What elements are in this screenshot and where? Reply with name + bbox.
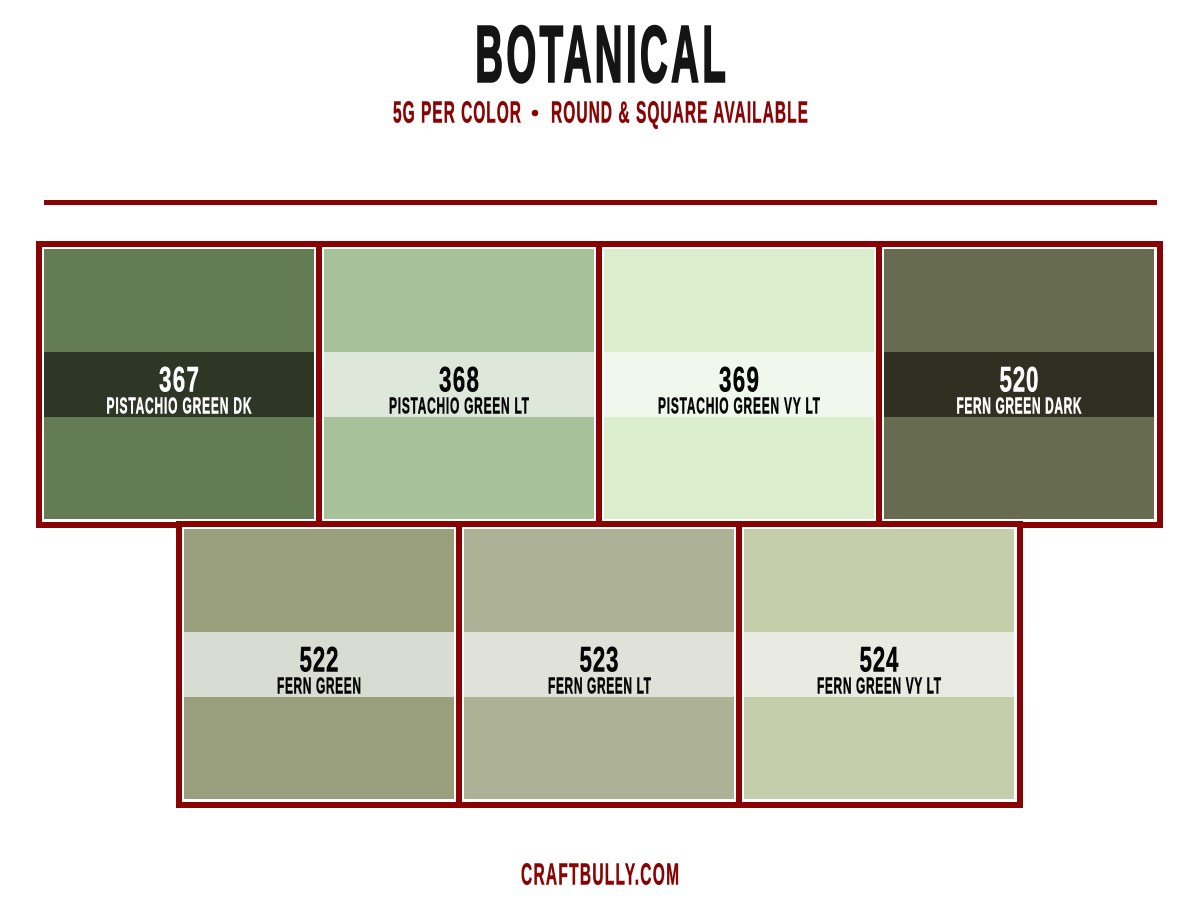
subtitle (393, 96, 808, 130)
swatch 369: PISTACHIO GREEN VY LT (658, 392, 820, 419)
swatch 522: 522 (299, 641, 339, 680)
swatch 520: FERN GREEN DARK (956, 392, 1082, 419)
swatch 369: 369 (719, 361, 759, 400)
swatch 522 (182, 527, 456, 802)
divider rule (44, 200, 1157, 205)
swatch 367: PISTACHIO GREEN DK (107, 392, 252, 419)
subtitle: 5G PER COLOR (393, 96, 521, 130)
panel: bottom row of swatches (176, 521, 1023, 808)
swatch 524: 524 (859, 641, 899, 680)
swatch 367: 367 (159, 361, 199, 400)
swatch 524 (742, 527, 1017, 802)
swatch 520: 520 (999, 361, 1039, 400)
footer website: CRAFTBULLY.COM (521, 858, 679, 892)
swatch 523 (462, 527, 736, 802)
swatch 523: FERN GREEN LT (548, 672, 651, 699)
swatch 368: PISTACHIO GREEN LT (389, 392, 529, 419)
title: BOTANICAL (475, 10, 726, 99)
swatch 368 (322, 247, 596, 522)
swatch 523: 523 (579, 641, 619, 680)
swatch 524: FERN GREEN VY LT (817, 672, 941, 699)
swatch 522: FERN GREEN (277, 672, 361, 699)
panel: top row of swatches (36, 241, 1163, 528)
swatch 368: 368 (439, 361, 479, 400)
swatch 367 (42, 247, 316, 522)
swatch 369 (602, 247, 876, 522)
subtitle: ROUND & SQUARE AVAILABLE (551, 96, 808, 130)
swatch 520 (882, 247, 1157, 522)
